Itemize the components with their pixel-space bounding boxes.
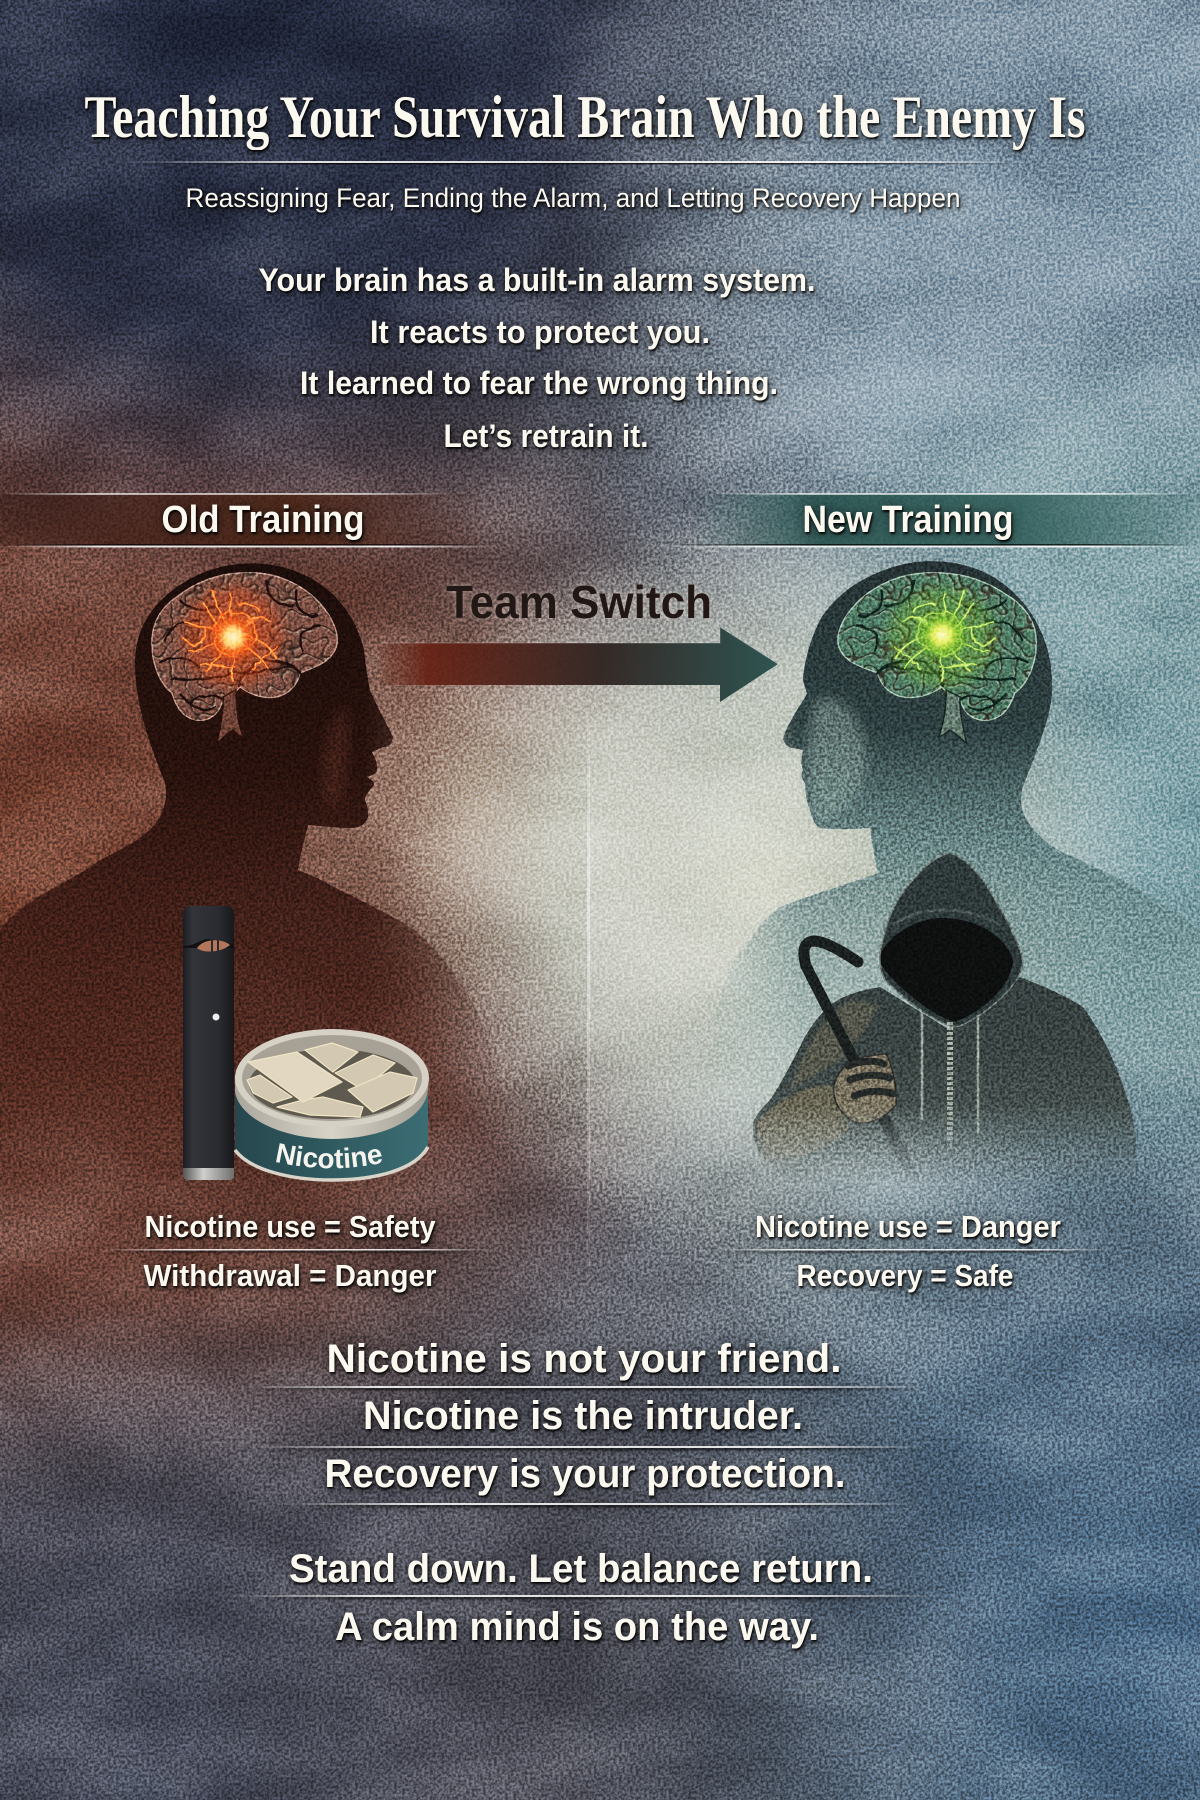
text block: final message: A calm mind is on the way. [335,1605,819,1649]
icon: nicotine pouch tin [234,1029,430,1182]
banner: old training [0,493,502,548]
banner: new training [658,493,1200,548]
icon: vape device [183,906,234,1180]
text block: new training equation: Recovery = Safe [796,1258,1014,1293]
text block: new training equation [712,1209,1114,1293]
text block: final message [230,1547,942,1649]
face highlight [808,698,866,821]
face highlight [322,705,349,812]
text block: new training equation: Nicotine use = Danger [755,1209,1061,1244]
icon: green glowing brain [830,565,1044,743]
text block: intro: Your brain has a built-in alarm system. [258,262,816,298]
text block: intro [258,262,816,454]
text block: closing statements [240,1337,930,1505]
drawstrings and zipper [922,1012,978,1135]
banner: old training: Old Training [162,499,364,541]
icon: red glowing brain [151,572,338,741]
text block: intro: It learned to fear the wrong thing. [300,365,778,401]
crowbar [804,941,914,1178]
banner: new training: New Training [802,499,1014,541]
text block: closing statements: Recovery is your protection. [324,1452,846,1496]
text block: old training equation: Withdrawal = Danger [144,1258,436,1293]
panel: new training head silhouette [720,561,1200,1090]
text block: old training equation: Nicotine use = Safety [144,1209,436,1244]
figure: hooded intruder with crowbar [753,853,1137,1185]
subtitle: Reassigning Fear, Ending the Alarm, and Letting Recovery Happen [186,183,960,213]
text block: intro: It reacts to protect you. [370,314,710,350]
text block: intro: Let’s retrain it. [444,418,648,454]
tin side [235,1095,428,1180]
panel divider: vertical light line [587,712,590,1312]
tin label: Nicotine [276,1143,382,1168]
arrow: team switch [380,627,778,702]
hood face opening [881,918,1013,1022]
panel: old training head silhouette [0,563,520,1240]
glove [834,1054,896,1123]
hoodie body [753,977,1137,1185]
hood [880,853,1023,1026]
text block: closing statements: Nicotine is the intruder. [363,1394,803,1438]
pouches [247,1043,417,1117]
text block: closing statements: Nicotine is not your friend. [326,1337,842,1381]
text block: old training equation [103,1209,494,1293]
text block: final message: Stand down. Let balance return. [289,1547,873,1591]
heading: team switch: Team Switch [446,576,712,628]
tin rim [235,1078,428,1139]
sleeve tint [790,1000,880,1090]
hood fold [893,910,1000,925]
